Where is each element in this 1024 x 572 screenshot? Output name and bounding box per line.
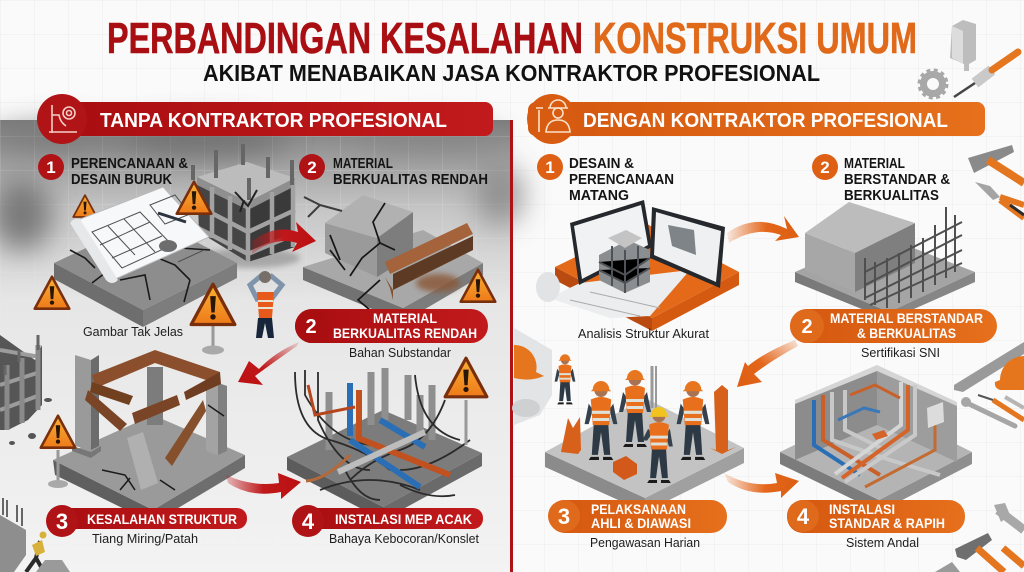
pill: material berstandar: MATERIAL BERSTANDAR [830, 310, 983, 326]
step 2 heading right: BERKUALITAS [844, 187, 939, 204]
step 1 heading left [38, 154, 188, 188]
illustration: ruined building at left edge [0, 335, 52, 445]
arrow: material to execution [737, 340, 798, 387]
icon: warning sign left of structure [41, 416, 75, 488]
icon: warning left bottom of slab [35, 277, 69, 309]
header: dengan kontraktor profesional [527, 94, 985, 144]
step 2 heading left: 2 [307, 158, 317, 177]
pill: instalasi standar: INSTALASI [829, 501, 895, 517]
label: bahaya kebocoran: Bahaya Kebocoran/Konslet [329, 532, 480, 546]
step 2 heading right: 2 [820, 158, 830, 177]
step 2 heading left [299, 154, 488, 188]
illustration: worried worker [250, 271, 282, 338]
worker white helmet [652, 366, 656, 408]
pill: instalasi standar [787, 500, 965, 533]
toolbox [613, 456, 637, 480]
header: tanpa kontraktor profesional: TANPA KONTRAKTOR PROFESIONAL [100, 110, 447, 132]
pill: material berkualitas rendah left [295, 309, 488, 343]
icon: warning sign on pole [191, 284, 235, 354]
pill: instalasi mep acak: INSTALASI MEP ACAK [335, 511, 472, 527]
icon: blueprint gear [49, 105, 77, 133]
pill: pelaksanaan ahli: PELAKSANAAN [591, 501, 686, 517]
label: analisis struktur akurat: Analisis Struktur Akurat [578, 327, 710, 341]
pill: pelaksanaan ahli: 3 [558, 504, 570, 529]
pill: material berstandar: 2 [801, 316, 813, 338]
illustration: team on concrete platform [545, 366, 744, 512]
illustration: messy MEP slab [287, 368, 482, 520]
pill: instalasi mep acak [292, 505, 483, 537]
label: gambar tak jelas: Gambar Tak Jelas [83, 325, 183, 339]
arrow: step 2 to step 3 [238, 342, 299, 385]
label: pengawasan harian: Pengawasan Harian [590, 536, 700, 550]
icon: warning small top [73, 195, 97, 217]
step 2 heading right: MATERIAL [844, 155, 905, 172]
title: PERBANDINGAN KESALAHAN [107, 14, 583, 63]
illustration: tidy MEP room [780, 365, 972, 512]
header: dengan kontraktor profesional: DENGAN KONTRAKTOR PROFESIONAL [583, 110, 948, 132]
icon: steel beams and helmet right edge [954, 342, 1024, 392]
icon: warning sign right of MEP [445, 358, 487, 445]
step 2 heading right: BERSTANDAR & [844, 171, 950, 188]
subtitle: AKIBAT MENABAIKAN JASA KONTRAKTOR PROFESIONAL [203, 60, 820, 86]
title: KONSTRUKSI UMUM [593, 14, 917, 63]
label: sertifikasi sni: Sertifikasi SNI [861, 346, 940, 360]
step 2 heading left: BERKUALITAS RENDAH [333, 171, 488, 188]
icon: warning right of beam [461, 270, 495, 302]
pill: material berstandar: & BERKUALITAS [857, 325, 956, 341]
pill: kesalahan struktur: 3 [56, 509, 68, 534]
pill: material berkualitas rendah left: MATERIAL [373, 310, 437, 326]
step 1 heading right: MATANG [569, 187, 629, 204]
orange column [710, 385, 736, 454]
pill: instalasi mep acak: 4 [302, 509, 315, 534]
step 1 heading right: DESAIN & [569, 155, 634, 172]
icon: hammer top right [968, 145, 1024, 183]
pill: pelaksanaan ahli [548, 500, 727, 533]
illustration: helmet and rolled plans at left of right panel [512, 328, 552, 425]
illustration: damaged concrete building [193, 144, 300, 268]
orange column broken [561, 417, 581, 454]
icon: hammers bottom right [935, 533, 1024, 572]
illustration: concrete block and worker bottom-left [0, 498, 70, 572]
pill: instalasi standar: 4 [797, 504, 810, 529]
pill: instalasi standar: STANDAR & RAPIH [829, 515, 945, 531]
icon: wrench and screwdrivers right edge [961, 395, 1024, 426]
step 1 heading right: 1 [545, 158, 555, 177]
icon: engineer [536, 100, 570, 132]
top right icons: bracket, gear, screwdriver [919, 20, 1018, 98]
pill: material berkualitas rendah left: 2 [305, 316, 317, 338]
arrow: design to material [727, 216, 799, 243]
pill: material berkualitas rendah left: BERKUALITAS RENDAH [333, 325, 477, 341]
pill: pelaksanaan ahli: AHLI & DIAWASI [591, 515, 691, 531]
pill: kesalahan struktur [46, 505, 247, 537]
arrow: step 3 to step 4 [226, 473, 301, 499]
label: bahan substandar: Bahan Substandar [349, 346, 451, 360]
pill: material berstandar [790, 309, 997, 343]
header: tanpa kontraktor profesional [37, 94, 493, 144]
illustration: small supervisor [555, 354, 575, 404]
illustration: concrete block and rebar [795, 202, 975, 320]
step 1 heading right: PERENCANAAN [569, 171, 674, 188]
arrow: step 1 to step 2 [252, 222, 316, 254]
label: sistem andal: Sistem Andal [846, 536, 919, 550]
step 1 heading right [537, 154, 674, 204]
icon: wrench bottom right [994, 503, 1024, 530]
label: tiang miring: Tiang Miring/Patah [92, 532, 198, 546]
pill: kesalahan struktur: KESALAHAN STRUKTUR [87, 511, 237, 527]
step 2 heading right [812, 154, 950, 204]
step 1 heading left: DESAIN BURUK [71, 171, 172, 188]
step 2 heading left: MATERIAL [333, 155, 393, 172]
illustration: cracked slab and blueprint [54, 187, 237, 327]
step 1 heading left: 1 [46, 158, 56, 177]
illustration: orange platform with tablets [536, 200, 739, 331]
illustration: broken structure slab [53, 350, 245, 523]
arrow: execution to mep [724, 473, 799, 498]
icon: pliers [975, 182, 1024, 218]
illustration: cracked block and rusty beam [303, 195, 483, 322]
panel: tanpa kontraktor background [0, 120, 524, 572]
icon: warning behind blueprint [177, 182, 211, 214]
step 1 heading left: PERENCANAAN & [71, 155, 188, 172]
